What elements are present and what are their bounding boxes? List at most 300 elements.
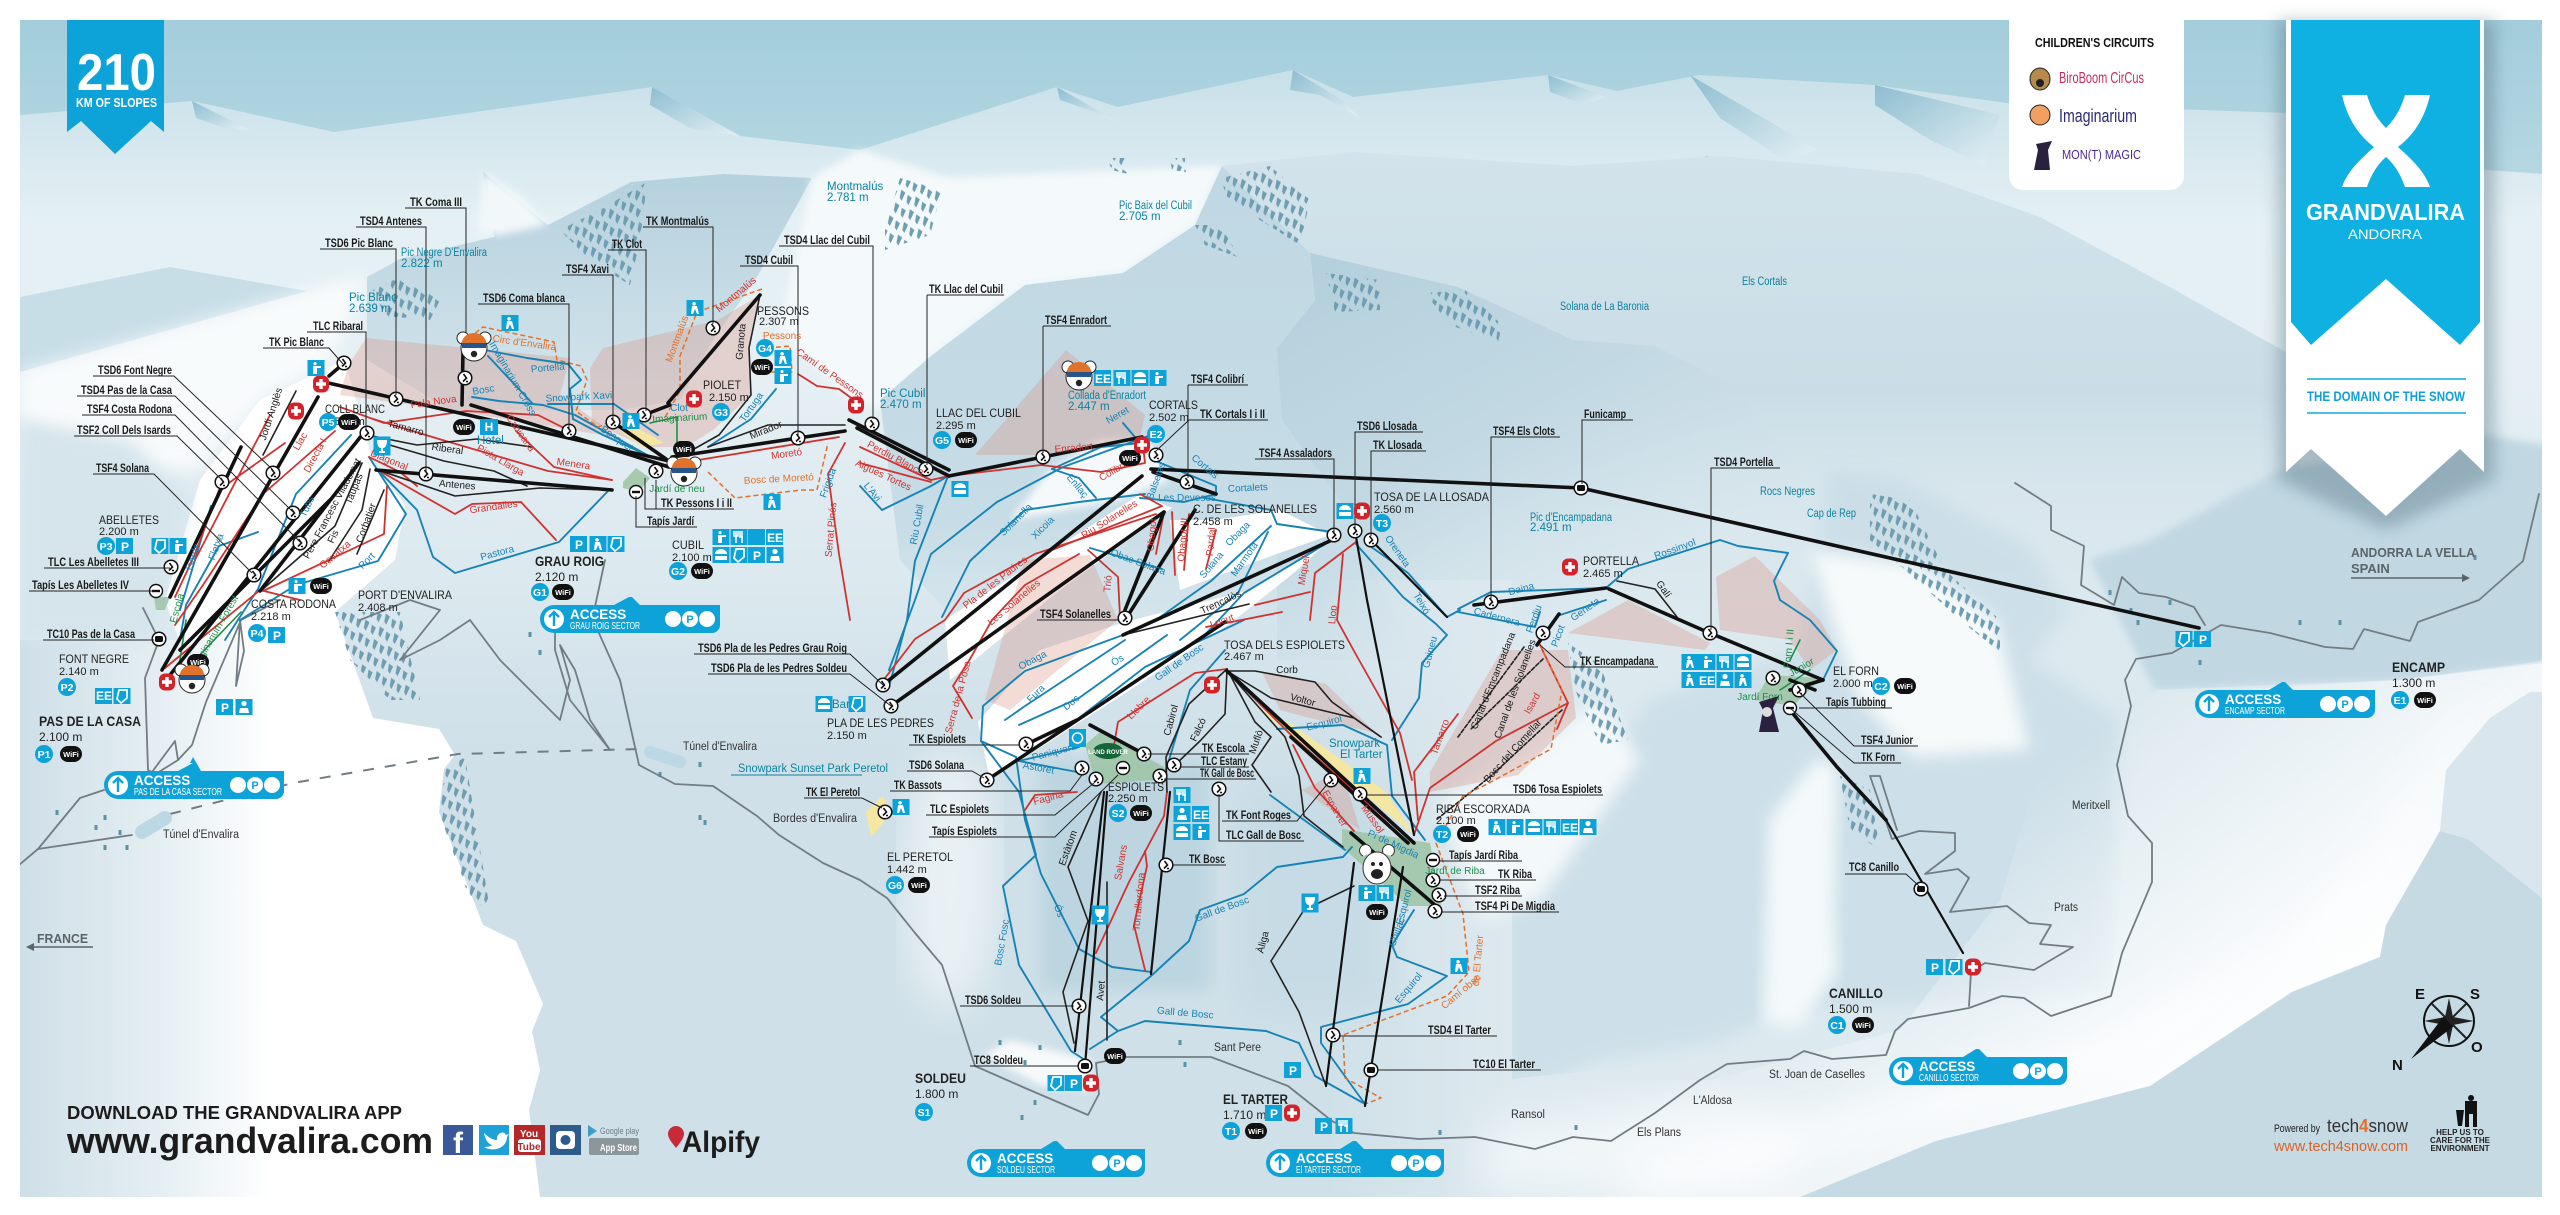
far peak shaded faces xyxy=(192,70,2000,275)
piste names: Daina xyxy=(1507,581,1536,598)
zone tags and wifi badges: G4 xyxy=(758,343,772,355)
zone tags and wifi badges: P5 xyxy=(322,417,335,429)
service icons: EE xyxy=(1699,674,1715,688)
access banner El Tarter: ACCESS xyxy=(1296,1151,1352,1166)
Mon(t) Magic logo xyxy=(2034,141,2141,170)
white snow channels xyxy=(374,466,1326,776)
place names and altitudes: COSTA RODONA xyxy=(251,597,336,611)
access banner Encamp: P xyxy=(2341,699,2349,711)
peak names: Pic d'Encampadana xyxy=(1530,512,1612,524)
piste names: Jordi Anglès xyxy=(258,387,285,442)
roads xyxy=(19,483,2539,1149)
zone tags and wifi badges: WiFi xyxy=(1133,809,1149,818)
place names and altitudes: 2.250 m xyxy=(1108,793,1148,805)
ribbon: Grandvalira logo: ANDORRA xyxy=(2348,226,2423,242)
place names and altitudes: PIOLET xyxy=(703,378,742,392)
zone tags and wifi badges: G6 xyxy=(888,880,902,892)
place names and altitudes: 1.710 m xyxy=(1223,1108,1266,1122)
place names and altitudes: 2.150 m xyxy=(709,392,749,404)
piste names: Guineu xyxy=(1421,635,1440,669)
label TK Montmalus xyxy=(643,214,713,324)
piste names: Paniquera xyxy=(1031,741,1078,764)
piste names: Gall de Bosc xyxy=(1156,1006,1214,1021)
piste names: Colibrí xyxy=(1097,460,1128,484)
piste names: Bosc Fosc xyxy=(993,919,1012,967)
place names and altitudes: L'Aldosa xyxy=(1693,1095,1733,1107)
piste names: Cabicana xyxy=(503,413,537,454)
zone tags and wifi badges: T3 xyxy=(1376,518,1388,530)
zone tags and wifi badges: WiFi xyxy=(63,750,79,759)
left mountains xyxy=(20,267,307,372)
badge: 210 km of slopes: KM OF SLOPES xyxy=(76,96,157,110)
place names and altitudes: Els Plans xyxy=(1637,1127,1681,1139)
piste names: Avet xyxy=(1095,980,1108,1001)
dashed tunnel road xyxy=(170,749,639,814)
peak names xyxy=(349,181,1856,761)
zone tags and wifi badges: C2 xyxy=(1874,681,1888,693)
peak names: Snowpark xyxy=(1329,738,1380,750)
right edge pale slope xyxy=(2440,703,2513,830)
label TSD6 Tosa Espiolets: TSD6 Tosa Espiolets xyxy=(1513,782,1602,796)
pink slope zones xyxy=(340,295,1837,830)
piste names: Portella xyxy=(530,362,566,375)
label TSF4 Assaladors xyxy=(1255,446,1334,532)
piste names: Riu Cubil xyxy=(909,504,926,546)
place names and altitudes: ENCAMP xyxy=(2392,660,2445,675)
access banner Pas de la Casa: ACCESS xyxy=(134,773,190,788)
place names and altitudes: CANILLO xyxy=(1829,986,1883,1001)
zone tags and wifi badges: S2 xyxy=(1112,808,1125,820)
label TSF4 Xavi xyxy=(562,262,613,419)
orange itineraries xyxy=(469,289,1562,1104)
label Tapis Jardi xyxy=(636,496,697,528)
piste names: Circ d'Envalira xyxy=(492,334,557,353)
label TLC Estany: TLC Estany xyxy=(1201,754,1247,768)
piste names: Lucut xyxy=(1209,612,1236,631)
place names and altitudes: FONT NEGRE xyxy=(59,652,129,666)
piste names: Falcó xyxy=(1189,716,1209,743)
ribbon: Grandvalira logo: THE DOMAIN OF THE SNOW xyxy=(2307,389,2465,404)
piste names: Obaga xyxy=(1017,649,1049,673)
label TK Forn xyxy=(1790,708,1901,764)
label TC8 Canillo xyxy=(1845,860,1919,886)
label TK Llac del Cubil: TK Llac del Cubil xyxy=(929,282,1003,296)
piste names: Fletxa xyxy=(207,532,227,562)
piste names: Jardí de neu xyxy=(649,484,705,495)
piste names: Grandalles xyxy=(469,499,518,516)
BiroBoom Circus logo: BiroBoom CirCus xyxy=(2059,70,2144,87)
access banner El Tarter: El TARTER SECTOR xyxy=(1296,1165,1361,1176)
service icons: P xyxy=(2199,633,2207,647)
zone tags and wifi badges: WiFi xyxy=(555,588,571,597)
piste names: Ós xyxy=(1051,903,1068,919)
label TSF4 Colibri xyxy=(1188,372,1248,478)
label TK Riba xyxy=(1439,867,1536,881)
label TK Espiolets xyxy=(909,732,1020,746)
label TK Espiolets: TK Espiolets xyxy=(913,732,966,746)
label TC10 Pas de la Casa: TC10 Pas de la Casa xyxy=(47,627,135,641)
label TK Gall de Bosc: TK Gall de Bosc xyxy=(1200,766,1254,780)
label TSD6 Pic Blanc: TSD6 Pic Blanc xyxy=(325,236,393,250)
label TSF4 Assaladors: TSF4 Assaladors xyxy=(1259,446,1332,460)
Imaginarium logo: Imaginarium xyxy=(2059,106,2137,126)
label Tapis Espiolets: Tapís Espiolets xyxy=(932,824,997,838)
place names and altitudes: 2.100 m xyxy=(1436,815,1476,827)
label TC8 Soldeu: TC8 Soldeu xyxy=(974,1053,1023,1067)
label TSD6 Pla de les Pedres Soldeu: TSD6 Pla de les Pedres Soldeu xyxy=(711,661,847,675)
label TLC Espiolets: TLC Espiolets xyxy=(930,802,989,816)
place names and altitudes: CORTALS xyxy=(1149,398,1198,412)
piste names: Clot xyxy=(670,403,688,414)
label TSF4 Solanelles: TSF4 Solanelles xyxy=(1040,607,1111,621)
piste names: Canal de les Solanelles xyxy=(1493,638,1539,740)
piste names: Pastora xyxy=(479,544,516,563)
label TLC Gall de Bosc xyxy=(1219,794,1304,842)
label TSD6 Llosada: TSD6 Llosada xyxy=(1357,419,1417,433)
footer: environment note: CARE FOR THE xyxy=(2430,1136,2491,1145)
service icons: P xyxy=(575,538,583,552)
label TSD6 Soldeu xyxy=(960,993,1074,1007)
place names and altitudes: 2.140 m xyxy=(59,666,99,678)
lower valley whitening xyxy=(1477,1093,1760,1193)
destination: Andorra la Vella xyxy=(2351,545,2476,582)
main left white snow area xyxy=(165,360,543,1197)
piste names: Escola xyxy=(168,592,187,624)
piste names: Picot xyxy=(1550,624,1568,648)
piste names: Cadernera xyxy=(1472,606,1521,629)
mid mountain under Enradort xyxy=(880,166,1315,596)
piste names: Gall de Bosc xyxy=(1153,642,1206,684)
service icons: EE xyxy=(1193,808,1209,822)
place names and altitudes: 1.500 m xyxy=(1829,1002,1872,1016)
right pale field xyxy=(1512,661,2542,1094)
label TK Cortals I i II: TK Cortals I i II xyxy=(1200,407,1265,421)
zone tags and wifi badges: WiFi xyxy=(676,445,692,454)
zone tags and wifi badges: WiFi xyxy=(958,436,974,445)
Mon(t) Magic logo: MON(T) MAGIC xyxy=(2062,147,2141,162)
trees xyxy=(57,555,2475,1136)
service icons: EE xyxy=(1095,372,1111,386)
place names and altitudes: 1.800 m xyxy=(915,1087,958,1101)
piste names: Serra de la Posa xyxy=(944,660,974,735)
piste names: Port xyxy=(357,551,378,572)
place names and altitudes: C. DE LES SOLANELLES xyxy=(1193,502,1317,516)
footer: app download: DOWNLOAD THE GRANDVALIRA APP xyxy=(67,1103,402,1123)
access banner Soldeu: SOLDEU SECTOR xyxy=(997,1165,1055,1176)
ski lifts xyxy=(150,295,2199,1106)
place names and altitudes: RIBA ESCORXADA xyxy=(1436,802,1530,816)
service icons: P xyxy=(1070,1077,1078,1091)
access banner El Tarter xyxy=(1266,1141,1444,1177)
piste names: Muflò xyxy=(1247,728,1266,756)
label Funicamp: Funicamp xyxy=(1584,407,1626,421)
access banner Soldeu: ACCESS xyxy=(997,1151,1053,1166)
X logo mark xyxy=(2342,95,2430,187)
piste names: Xicoia xyxy=(1030,514,1057,542)
place names and altitudes: TOSA DELS ESPIOLETS xyxy=(1224,638,1345,652)
piste names: Junior xyxy=(1787,656,1817,679)
piste names: Aigües Tortes xyxy=(853,458,913,493)
piste names: Forn I i II xyxy=(1782,629,1797,669)
green beginners pistes xyxy=(180,417,1810,690)
zone tags and wifi badges: WiFi xyxy=(1248,1127,1264,1136)
place names and altitudes: 2.560 m xyxy=(1374,504,1414,516)
far mountain ridge xyxy=(20,70,2542,404)
label TK Coma III: TK Coma III xyxy=(410,195,462,209)
zone tags and wifi badges: WiFi xyxy=(1460,830,1476,839)
label TSD6 Font Negre: TSD6 Font Negre xyxy=(98,363,172,377)
zone tags and wifi badges: T1 xyxy=(1225,1126,1237,1138)
label TSF4 Els Clots: TSF4 Els Clots xyxy=(1493,424,1555,438)
ribbon: Grandvalira logo xyxy=(2278,20,2495,530)
central dark mountain xyxy=(1277,253,1662,638)
label TSD6 Pla de les Pedres Grau Roig: TSD6 Pla de les Pedres Grau Roig xyxy=(698,641,847,655)
piste names: Isard xyxy=(1523,691,1543,716)
label TSD4 Llac del Cubil: TSD4 Llac del Cubil xyxy=(784,233,870,247)
piste names: Antenes xyxy=(438,478,476,493)
zone tags and wifi badges: C1 xyxy=(1830,1020,1844,1032)
label TK Llosada xyxy=(1371,438,1426,536)
piste names: Oreneta xyxy=(1382,534,1412,570)
label TK Llac del Cubil xyxy=(927,282,1004,465)
mascots xyxy=(175,332,1779,884)
footer: environment note: ENVIRONMENT xyxy=(2430,1144,2490,1153)
label TC8 Canillo: TC8 Canillo xyxy=(1849,860,1899,874)
ribbon: Grandvalira logo: GRANDVALIRA xyxy=(2306,199,2465,225)
zone tags and wifi badges: G5 xyxy=(935,435,949,447)
piste names: Granota xyxy=(734,323,749,360)
piste names: Galí xyxy=(1653,579,1673,600)
zone tags and wifi badges: WiFi xyxy=(341,418,357,427)
label TSD6 Pla de les Pedres Soldeu xyxy=(708,661,891,706)
piste names: Pala Nova xyxy=(410,394,458,411)
green beginner zones xyxy=(154,468,1822,906)
place names and altitudes: Túnel d'Envalira xyxy=(163,829,240,841)
place names and altitudes: 2.218 m xyxy=(251,611,291,623)
label TLC Ribaral xyxy=(307,319,366,431)
place names and altitudes: 2.465 m xyxy=(1583,568,1623,580)
label TSD4 Cubil: TSD4 Cubil xyxy=(745,253,793,267)
service icons: P xyxy=(1320,1120,1328,1134)
piste names: Tamarro xyxy=(387,419,425,439)
place names and altitudes: PESSONS xyxy=(757,304,809,318)
peak names: 2.639 m xyxy=(349,303,391,315)
label TK Pessons I i II: TK Pessons I i II xyxy=(661,496,732,510)
label Tapis Jardi: Tapís Jardí xyxy=(647,514,694,528)
label TSD6 Coma blanca: TSD6 Coma blanca xyxy=(483,291,565,305)
zone tags and wifi badges: P3 xyxy=(100,541,113,553)
label TSF2 Coll Dels Isards xyxy=(74,423,222,480)
piste names: Obaga xyxy=(1224,519,1253,549)
piste names: Llop xyxy=(1327,604,1340,625)
piste names: Camí de Pessons xyxy=(794,347,865,401)
label TLC Espiolets xyxy=(926,783,1094,816)
service icons: P xyxy=(221,701,229,715)
access banner Pas de la Casa: P xyxy=(251,780,259,792)
place names and altitudes: 2.100 m xyxy=(672,552,712,564)
piste names: Pardal xyxy=(1205,527,1218,557)
footer: tech4snow credit: tech4snow xyxy=(2327,1116,2409,1136)
sky xyxy=(20,20,2542,180)
footer: environment note xyxy=(2430,1095,2491,1153)
zone tags and wifi badges: WiFi xyxy=(313,582,329,591)
label TSF4 Enradort: TSF4 Enradort xyxy=(1045,313,1107,327)
piste names: Jardí Forn xyxy=(1737,692,1783,703)
peak names: Pic Baix del Cubil xyxy=(1119,200,1192,212)
piste names: Taupas xyxy=(344,472,366,506)
label TSD4 El Tarter: TSD4 El Tarter xyxy=(1428,1023,1491,1037)
peak names: Rocs Negres xyxy=(1760,486,1815,498)
piste names: Esquirol xyxy=(1305,714,1343,734)
place names and altitudes: PAS DE LA CASA xyxy=(39,714,141,729)
label TSF2 Coll Dels Isards: TSF2 Coll Dels Isards xyxy=(77,423,171,437)
label TK Encampadana xyxy=(1540,645,1658,668)
peak names: Cap de Rep xyxy=(1807,508,1856,520)
piste names: Esparver xyxy=(1319,789,1349,829)
place names and altitudes: 2.528 m xyxy=(325,416,365,428)
piste names: Llebre xyxy=(1126,694,1153,722)
BiroBoom Circus logo xyxy=(2030,68,2144,90)
label TSD4 Portella: TSD4 Portella xyxy=(1714,455,1773,469)
piste names: Bosc xyxy=(472,383,495,398)
snow band right xyxy=(1810,550,2029,757)
footer: environment note: HELP US TO xyxy=(2436,1128,2484,1137)
place names and altitudes: EL PERETOL xyxy=(887,850,953,864)
piste names: Bosquet xyxy=(598,424,635,454)
piste names: Gavatxa xyxy=(318,539,354,571)
zone tags and wifi badges: WiFi xyxy=(694,567,710,576)
tunnel capsule east xyxy=(650,752,680,762)
piste names: Les Deveses xyxy=(1158,493,1216,504)
piste names: Geneta xyxy=(1569,596,1603,624)
label TSD6 Pic Blanc xyxy=(320,236,396,395)
piste names: Solanella xyxy=(998,501,1035,539)
service icons: EE xyxy=(96,689,112,703)
label TLC Ribaral: TLC Ribaral xyxy=(313,319,363,333)
label TSF4 Solana xyxy=(93,461,252,573)
place names and altitudes: Ransol xyxy=(1511,1109,1545,1121)
piste names: Fagina xyxy=(1032,789,1065,808)
service icons: Bar xyxy=(832,699,850,711)
panel: children's circuits: CHILDREN'S CIRCUITS xyxy=(2035,36,2154,50)
piste names: Àliga xyxy=(1253,929,1272,955)
zone tags and wifi badges: P4 xyxy=(251,628,264,640)
label TSD6 Coma blanca xyxy=(478,291,569,429)
piste names: Esquirol xyxy=(1393,971,1425,1006)
access banner Canillo: ACCESS xyxy=(1919,1059,1975,1074)
label TK El Peretol: TK El Peretol xyxy=(806,785,860,799)
zone tags and wifi badges: G2 xyxy=(671,566,685,578)
social icons: Tube xyxy=(517,1142,541,1153)
place names and altitudes: 2.120 m xyxy=(535,570,578,584)
piste names: Trió xyxy=(1102,574,1115,593)
piste names: Tortuga xyxy=(738,390,766,424)
piste names: Imaginarium Cross xyxy=(486,340,538,418)
label Bordes d'Envalira: Bordes d'Envalira xyxy=(773,813,858,825)
peak names: 2.781 m xyxy=(827,192,869,204)
label TSD4 Antenes: TSD4 Antenes xyxy=(360,214,422,228)
social icons: Google play xyxy=(600,1126,639,1136)
big right range xyxy=(1222,156,2300,496)
label TK Coma III xyxy=(405,195,466,345)
piste names: Serrat Pinós xyxy=(824,502,839,558)
place names and altitudes: PLA DE LES PEDRES xyxy=(827,716,934,730)
blue pistes xyxy=(180,350,1837,1104)
place names and altitudes: PORTELLA xyxy=(1583,554,1639,568)
peak names: Els Cortals xyxy=(1742,276,1787,288)
place names and altitudes: 2.307 m xyxy=(759,316,799,328)
label TSF2 Riba: TSF2 Riba xyxy=(1475,883,1520,897)
label TK Riba: TK Riba xyxy=(1498,867,1532,881)
piste names: Corbatier xyxy=(354,501,379,544)
diagonal white band xyxy=(1716,663,2542,1197)
access banner Grau Roig xyxy=(540,597,720,633)
piste names: Esquirol xyxy=(1395,888,1415,926)
place names and altitudes: 1.300 m xyxy=(2392,676,2435,690)
place names and altitudes: Sant Pere xyxy=(1214,1042,1261,1054)
label TSD4 Antenes xyxy=(356,214,426,472)
label TK Cortals I i II xyxy=(1156,407,1268,451)
zone tags and wifi badges: T2 xyxy=(1436,829,1448,841)
access banner Soldeu xyxy=(967,1141,1145,1177)
piste names: Mussol xyxy=(1358,803,1386,836)
piste names: Estàtom xyxy=(1057,829,1080,867)
piste names: Diagonal xyxy=(369,448,409,473)
piste names: Balsetes xyxy=(1145,461,1168,501)
piste names: Cortals xyxy=(1189,453,1220,481)
footer: app download: www.grandvalira.com xyxy=(66,1120,433,1161)
Imaginarium logo xyxy=(2030,105,2137,126)
label TSD6 Solana xyxy=(907,758,984,778)
piste names: Snowpark Xavi xyxy=(545,390,612,405)
zone tags and wifi badges: WiFi xyxy=(1122,454,1138,463)
piste names: Riberal xyxy=(431,442,464,457)
zone tags and wifi badges xyxy=(35,339,2436,1140)
label TLC Gall de Bosc: TLC Gall de Bosc xyxy=(1226,828,1301,842)
label TSF4 Pi De Migdia xyxy=(1441,899,1559,913)
piste names: Miquel xyxy=(1297,555,1313,586)
label TK Font Roges xyxy=(1222,782,1329,822)
label TSD4 Pas de la Casa xyxy=(77,383,293,512)
label TK Clot xyxy=(608,237,646,411)
access banner Encamp: ACCESS xyxy=(2225,692,2281,707)
service icons: P xyxy=(1931,961,1939,975)
piste names: Les Solanelles xyxy=(986,578,1043,628)
piste names: Canal d'Emcampadana xyxy=(1469,631,1518,731)
label TSD6 Pla de les Pedres Grau Roig xyxy=(694,641,883,685)
label Snowpark Sunset Park Peretol: Snowpark Sunset Park Peretol xyxy=(738,763,888,775)
place names and altitudes: St. Joan de Caselles xyxy=(1769,1069,1865,1081)
place names and altitudes: 2.458 m xyxy=(1193,516,1233,528)
access banner Canillo: P xyxy=(2034,1066,2042,1078)
place names and altitudes: PORT D'ENVALIRA xyxy=(358,588,452,602)
piste names: Perdiu xyxy=(1525,604,1545,635)
mascots: LAND ROVER xyxy=(1088,750,1128,756)
destination: France xyxy=(26,931,93,951)
zone tags and wifi badges: WiFi xyxy=(190,658,206,667)
place names and altitudes: ABELLETES xyxy=(99,513,159,527)
place names and altitudes: Meritxell xyxy=(2072,800,2110,812)
label TSF4 Solana: TSF4 Solana xyxy=(96,461,149,475)
piste names: Fis xyxy=(326,529,342,545)
piste names: Astoret xyxy=(1022,760,1055,777)
piste names: Rossinyol xyxy=(1653,537,1697,562)
place names and altitudes: TOSA DE LA LLOSADA xyxy=(1374,490,1489,504)
piste names: Montmalús xyxy=(714,275,759,315)
place names and altitudes: EL TARTER xyxy=(1223,1092,1288,1107)
place names and altitudes: 2.502 m xyxy=(1149,412,1189,424)
zone tags and wifi badges: WiFi xyxy=(1855,1021,1871,1030)
